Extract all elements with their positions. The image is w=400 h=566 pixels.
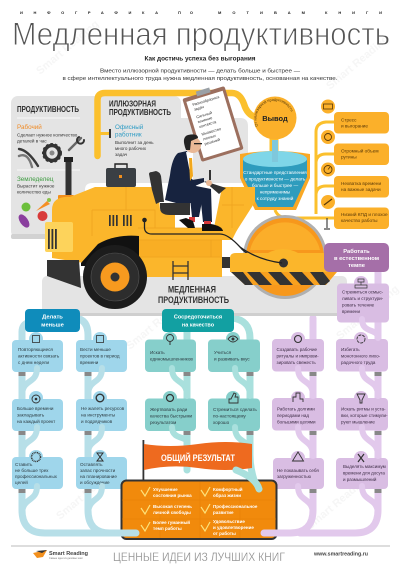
pipes: teal bbox=[187, 318, 256, 486]
card: three goals: целей bbox=[15, 479, 28, 485]
card: time buffer bbox=[76, 450, 127, 493]
front wheel bbox=[83, 245, 147, 309]
pipe branches: purple bbox=[298, 319, 378, 515]
panel: results bbox=[118, 470, 290, 539]
card: three goals: профессиональных bbox=[15, 474, 58, 479]
card: repeat: с днем недели bbox=[18, 360, 50, 365]
text: Smart Reading bbox=[34, 18, 101, 77]
hood and body bbox=[52, 187, 238, 277]
icon: gear bbox=[43, 144, 61, 162]
card: long goals: периодами над bbox=[277, 413, 309, 418]
icon: pliers bbox=[19, 149, 38, 167]
footer url: www.smartreading.ru bbox=[313, 552, 368, 558]
heading: illusory: ИЛЛЮЗОРНАЯ bbox=[109, 100, 156, 108]
worker text bbox=[17, 123, 78, 144]
heading: quality: на качество bbox=[182, 322, 215, 328]
road label: МЕДЛЕННАЯ bbox=[168, 284, 216, 294]
consequence 2: рутины bbox=[341, 154, 357, 160]
text: Smart Reading bbox=[324, 33, 391, 92]
office worker text: работник bbox=[115, 130, 142, 138]
card: time buffer: и обсуждение bbox=[80, 480, 110, 485]
steamroller bbox=[45, 134, 337, 309]
result texts: от работы bbox=[213, 530, 236, 536]
grey road panel bbox=[42, 276, 347, 316]
card: time buffer: Оставлять bbox=[80, 462, 103, 467]
clipboard checklist: Сильный bbox=[196, 110, 213, 119]
tank with standard view bbox=[240, 140, 310, 210]
card: more time: Больше времени bbox=[17, 406, 54, 411]
card: leisure: и размышлений bbox=[343, 476, 377, 482]
header kicker: ИНФОГРАФИКА bbox=[20, 10, 158, 15]
heading: do less: Делать bbox=[42, 314, 63, 320]
card: structure bbox=[337, 276, 389, 322]
dashboard bbox=[212, 187, 255, 238]
conclusion word: Вывод bbox=[262, 114, 288, 123]
office worker text: Выполнит за день bbox=[115, 140, 154, 145]
column: do less bbox=[12, 309, 127, 493]
consequence 1: и выгорание bbox=[341, 124, 368, 128]
worker text: Сделает нужное количество bbox=[17, 132, 78, 138]
card: rhythms bbox=[336, 391, 388, 435]
card: rituals: ритуалы и импрови- bbox=[276, 354, 319, 358]
result texts: и удовлетворение bbox=[213, 525, 254, 530]
card: leisure: Выделять максимум bbox=[343, 464, 386, 469]
result texts: состояния рынка bbox=[153, 493, 192, 498]
result texts: Более гуманный bbox=[153, 519, 190, 525]
icon: spiral bbox=[321, 130, 335, 144]
hose bbox=[144, 220, 282, 263]
card: more time: на каждый проект bbox=[17, 418, 56, 424]
tank text: неприменимы bbox=[260, 190, 291, 194]
clipboard checklist: личных bbox=[202, 133, 217, 141]
pipe branches: teal bbox=[172, 368, 250, 454]
heading: quality: Сосредоточиться bbox=[174, 314, 222, 320]
clipboard checklist: задач bbox=[193, 104, 205, 112]
card: do not show busyness: Не показывать себя bbox=[277, 468, 319, 473]
yellow pipe to conclusion bbox=[98, 93, 262, 156]
text: Smart Reading bbox=[124, 293, 191, 352]
card: three goals: не больше трех bbox=[15, 468, 49, 473]
intro text: в сфере интеллектуального труда нужна медленная продуктивность, основанная на качестве. bbox=[62, 76, 338, 82]
office worker text bbox=[115, 123, 154, 157]
result texts: Удовольствие bbox=[213, 519, 245, 524]
tank text bbox=[243, 170, 307, 201]
result texts: образ жизни bbox=[213, 492, 241, 498]
icon: clock bbox=[321, 162, 335, 176]
card: more time bbox=[12, 391, 63, 435]
card: three goals: Ставить bbox=[15, 462, 33, 467]
clipboard checklist: Разнообразных bbox=[192, 94, 220, 107]
front blade bbox=[47, 260, 81, 288]
heading: illusory: ПРОДУКТИВНОСТЬ bbox=[109, 108, 171, 117]
consequence 2: Огромный объем bbox=[341, 148, 379, 154]
heading: illusory bbox=[109, 100, 171, 117]
card: long goals: Работать долгими bbox=[277, 406, 315, 412]
header kicker bbox=[20, 10, 382, 15]
icon: vegetables bbox=[16, 198, 51, 229]
front wheel arch bbox=[81, 236, 139, 266]
result texts: Профессиональное bbox=[213, 503, 258, 509]
worker text: Рабочий bbox=[17, 123, 42, 131]
card: fewer projects: времени bbox=[80, 360, 99, 365]
roller drum bbox=[243, 215, 327, 299]
heading: natural tempo: в естественном bbox=[334, 256, 379, 262]
consequence 3: Нехватка времени bbox=[341, 181, 382, 186]
card: three goals bbox=[12, 450, 63, 493]
card: peers bbox=[145, 332, 196, 376]
card: resources bbox=[76, 391, 127, 435]
heading: do less: меньше bbox=[41, 322, 65, 328]
overall result banner: ОБЩИЙ РЕЗУЛЬТАТ bbox=[161, 452, 235, 464]
card: rhythms: Искать ритмы и уста- bbox=[341, 406, 386, 412]
card: leisure bbox=[336, 451, 388, 493]
heading: do less bbox=[25, 309, 80, 332]
card: resources: на инструменты bbox=[81, 412, 115, 418]
seat bbox=[149, 171, 190, 215]
card: repeat: Повторяющиеся bbox=[18, 347, 53, 352]
tank text: больше и быстрее — bbox=[252, 183, 298, 188]
card: strive: Стремиться сделать bbox=[213, 407, 257, 412]
footer logo bbox=[33, 550, 88, 560]
man at the wheel bbox=[165, 134, 226, 231]
footer logo: Самые идеи из деловых книг bbox=[49, 557, 83, 560]
blue pipe end bbox=[118, 530, 136, 536]
card: taste bbox=[208, 332, 260, 376]
card: repeat: активности связать bbox=[18, 354, 60, 358]
header kicker: ПО bbox=[178, 10, 193, 15]
result texts: темп работы bbox=[153, 525, 182, 531]
icon: battery bbox=[321, 100, 335, 114]
vents bbox=[109, 215, 132, 226]
card: structure: Стремиться осмыс- bbox=[342, 290, 384, 294]
cabin backdrop bbox=[85, 183, 240, 240]
clipboard checklist: влияние bbox=[197, 115, 213, 124]
result texts: Комфортный bbox=[213, 486, 243, 492]
icon: wrench bbox=[69, 137, 84, 150]
card: avoid monotony: радочного труда bbox=[341, 360, 376, 365]
worker text: деталей в час bbox=[17, 138, 47, 144]
consequence 4: Низкий КПД и плохое bbox=[341, 211, 388, 217]
intro text bbox=[62, 68, 338, 82]
card: resources: и подрядчиков bbox=[81, 419, 113, 424]
card: rituals: зировать свежесть bbox=[276, 360, 316, 365]
card: strive: хорошо bbox=[213, 420, 230, 425]
card: rhythms: руют мышление bbox=[341, 420, 375, 424]
footer logo: Smart Reading bbox=[49, 551, 88, 557]
card: sacrifice: результатом bbox=[150, 420, 176, 425]
tank text: к сотруду знаний bbox=[257, 195, 294, 201]
office worker text: много рабочих bbox=[115, 146, 147, 151]
card: long goals bbox=[272, 391, 324, 435]
clipboard checklist: решений bbox=[204, 137, 221, 146]
teal pipe end bbox=[236, 470, 259, 489]
exhaust bbox=[58, 157, 74, 206]
result texts: Высокая степень bbox=[153, 504, 192, 509]
overall result banner bbox=[142, 440, 252, 480]
farmer text: Земледелец bbox=[17, 176, 54, 183]
card: structure: ливать и структури- bbox=[342, 296, 384, 301]
icon: gauge bbox=[321, 195, 335, 209]
card: rituals: Создавать рабочие bbox=[276, 347, 318, 352]
heading: natural tempo: темпе bbox=[348, 263, 366, 269]
consequence 4 bbox=[334, 208, 389, 229]
consequence 4: качество работы bbox=[341, 218, 378, 223]
farmer text bbox=[17, 176, 55, 194]
heading: quality bbox=[162, 309, 234, 332]
card: rituals bbox=[272, 332, 324, 376]
consequence 3 bbox=[334, 176, 389, 198]
card: long goals: большими целями bbox=[277, 420, 316, 424]
ladder bbox=[173, 261, 188, 280]
tank text: Стандартные представления bbox=[243, 170, 307, 175]
result texts: Улучшение bbox=[153, 487, 178, 492]
consequence 2 bbox=[334, 144, 389, 165]
clipboard checklist: контекста bbox=[198, 119, 217, 129]
card: sacrifice bbox=[145, 391, 196, 435]
card: time buffer: на планирование bbox=[80, 474, 117, 479]
card: avoid monotony: Избегать bbox=[341, 347, 360, 352]
clipboard checklist: Множество bbox=[201, 126, 222, 137]
result texts bbox=[153, 486, 258, 536]
purple pipe end bbox=[264, 530, 290, 536]
panel: productivity bbox=[11, 96, 181, 239]
card: sacrifice: Жертвовать ради bbox=[150, 407, 188, 412]
road label: ПРОДУКТИВНОСТЬ bbox=[158, 295, 229, 305]
road label bbox=[158, 284, 229, 305]
header kicker: МОТИВАМ bbox=[218, 10, 306, 15]
consequence 1: Стресс bbox=[341, 118, 357, 122]
curved label: От иллюзорной продуктивности bbox=[254, 98, 293, 126]
panel: illusory productivity bbox=[98, 93, 262, 183]
card: peers: единомышленников bbox=[150, 356, 193, 362]
checkmarks bbox=[141, 487, 210, 531]
office worker text: задач bbox=[115, 152, 128, 157]
office worker text: Офисный bbox=[115, 123, 144, 131]
card: structure: ровать течение bbox=[342, 302, 375, 308]
connector bbox=[99, 129, 111, 138]
heading: natural tempo: Работать bbox=[343, 248, 370, 255]
card: rhythms: вки, которые стимули- bbox=[341, 413, 388, 418]
card: taste: Учиться bbox=[214, 350, 232, 355]
card: fewer projects bbox=[76, 332, 127, 376]
card: more time: закладывать bbox=[17, 412, 45, 418]
card: avoid monotony: монотонного лихо- bbox=[341, 354, 381, 358]
yellow branch pipes bbox=[275, 122, 336, 218]
farmer text: количество еды bbox=[17, 190, 51, 194]
card: strive: по-настоящему bbox=[213, 414, 247, 418]
header kicker: КНИГИ bbox=[325, 10, 382, 15]
panel: consequences bbox=[321, 100, 389, 229]
fork bbox=[222, 247, 337, 285]
conclusion circle bbox=[254, 96, 296, 152]
card: resources: Не жалеть ресурсов bbox=[81, 406, 125, 411]
pipes: blue bbox=[22, 318, 135, 533]
intro text: Вместо иллюзорной продуктивности — делать больше и быстрее — bbox=[100, 68, 300, 74]
card: fewer projects: проектов в период bbox=[80, 354, 120, 358]
consequence 3: на важные задачи bbox=[341, 187, 381, 192]
briefcase bbox=[106, 164, 136, 187]
consequence 1 bbox=[334, 112, 389, 134]
result texts: развитие bbox=[213, 510, 234, 515]
card: fewer projects: Вести меньше bbox=[80, 347, 111, 352]
card: avoid monotony bbox=[336, 332, 388, 376]
heading: productivity: ПРОДУКТИВНОСТЬ bbox=[17, 105, 79, 114]
pipes: purple bbox=[264, 272, 378, 533]
card: leisure: времени для досуга bbox=[343, 470, 385, 476]
text: Smart Reading bbox=[54, 463, 121, 522]
subtitle: Как достичь успеха без выгорания bbox=[144, 56, 256, 62]
card: repeat bbox=[12, 332, 63, 376]
farmer text: Вырастит нужное bbox=[17, 184, 55, 188]
heading: natural tempo bbox=[324, 243, 389, 272]
card: taste: и развивать вкус bbox=[214, 356, 250, 362]
pipe branches: blue bbox=[22, 368, 102, 515]
grille bbox=[45, 222, 73, 252]
card: do not show busyness: загруженностью bbox=[277, 474, 312, 479]
clipboard checklist bbox=[181, 83, 244, 162]
card: structure: времени bbox=[342, 309, 360, 314]
column: natural tempo bbox=[272, 243, 389, 493]
column: focus on quality bbox=[145, 309, 260, 435]
tank text: о продуктивности — делать bbox=[245, 176, 306, 182]
footer slogan: ЦЕННЫЕ ИДЕИ ИЗ ЛУЧШИХ КНИГ bbox=[113, 552, 286, 564]
text: Smart Reading bbox=[304, 473, 371, 532]
card: sacrifice: качества быстрыми bbox=[150, 414, 192, 418]
text: Smart Reading bbox=[334, 283, 400, 342]
card: do not show busyness bbox=[273, 451, 324, 493]
card: peers: Искать bbox=[150, 350, 165, 355]
result texts: личной свободы bbox=[153, 509, 191, 515]
card: time buffer: запас прочности bbox=[80, 468, 116, 473]
card: strive bbox=[208, 391, 260, 435]
